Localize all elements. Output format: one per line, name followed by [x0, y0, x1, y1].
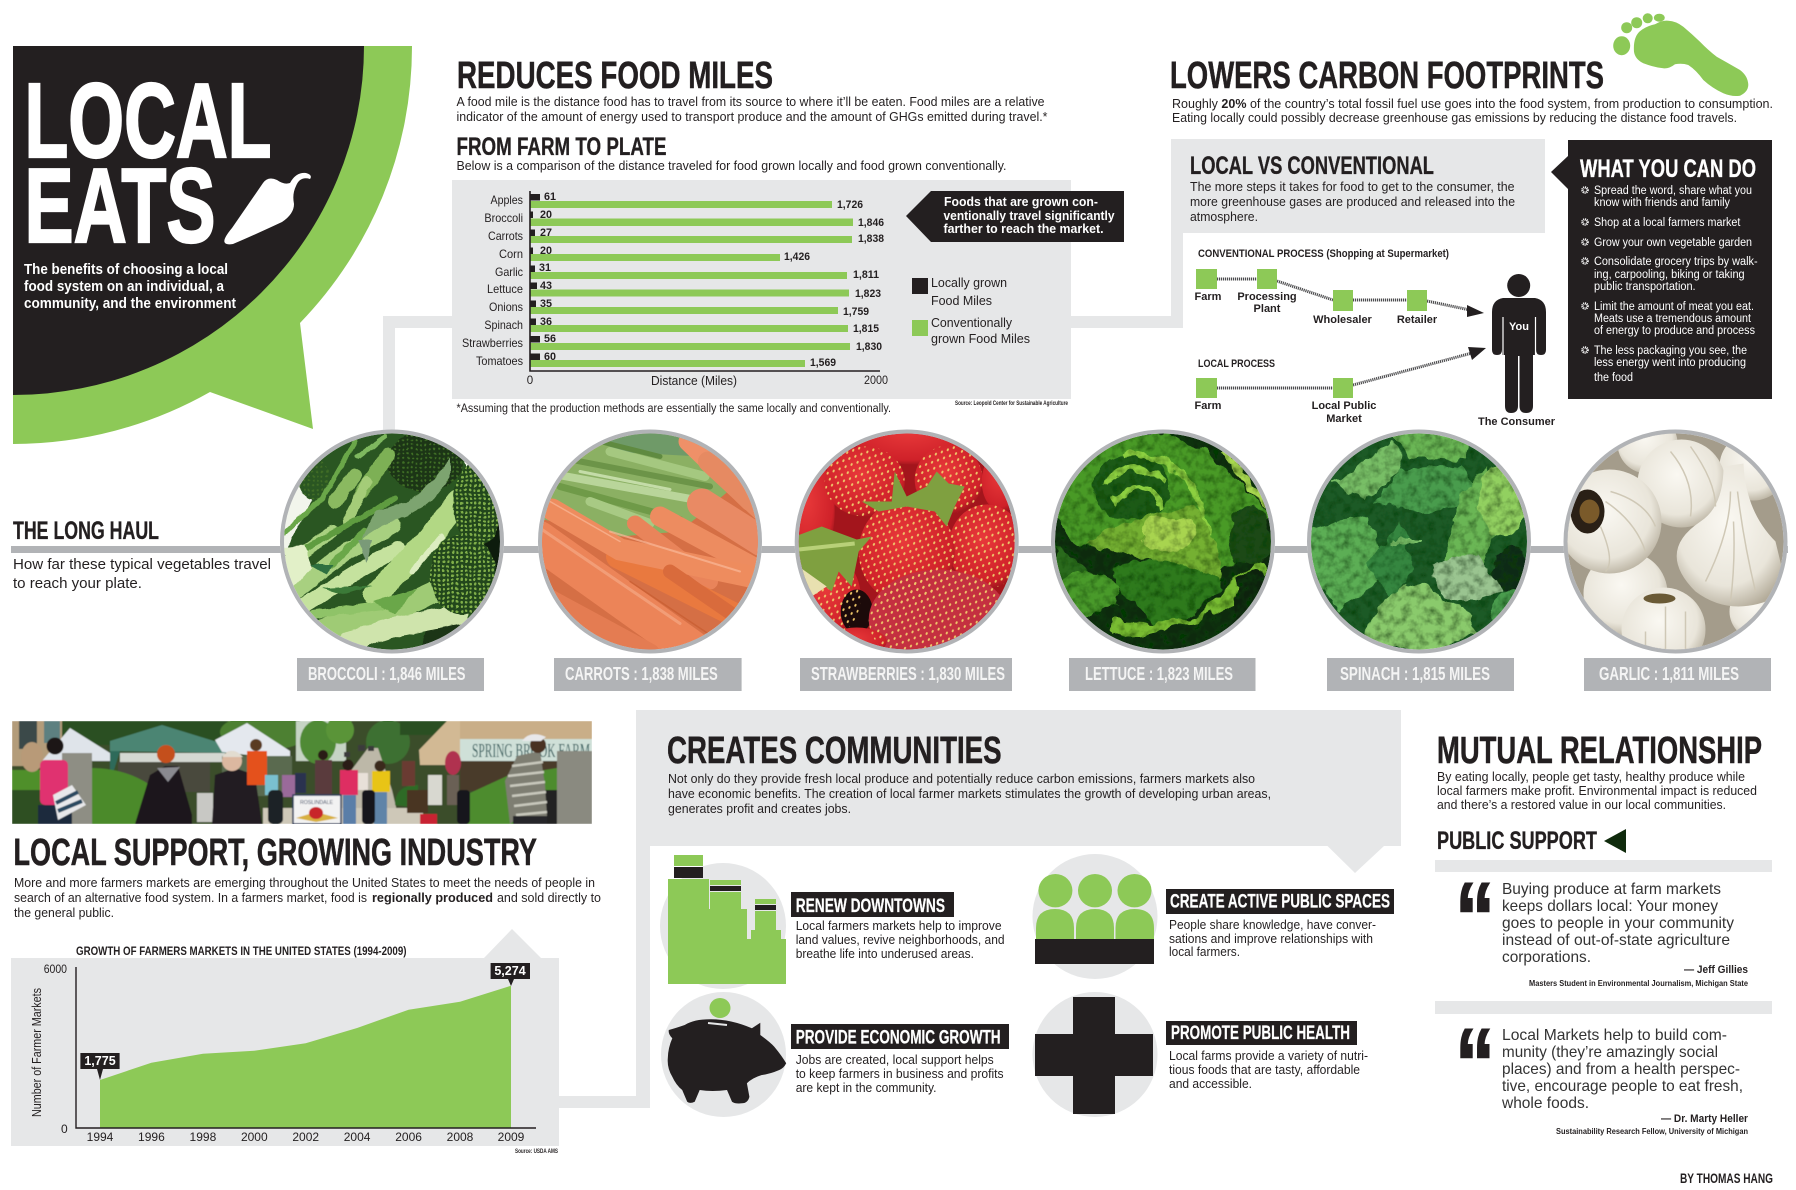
man in black [212, 768, 262, 824]
label: carrots: CARROTS : 1,838 MILES [565, 664, 718, 684]
intro text [1437, 769, 1757, 812]
intro text [14, 875, 601, 920]
diagram: conventional process: CONVENTIONAL PROCESS (Shopping at Supermarket) [1198, 248, 1449, 260]
x axis labels: 1994 [87, 1130, 114, 1144]
category labels: Spinach [484, 318, 523, 332]
axis labels: 0 [527, 375, 533, 387]
block: promote public health: tious foods that are tasty, affordable [1169, 1062, 1360, 1077]
callout: foods travel farther: ventionally travel significantly [944, 209, 1115, 223]
heading: LOCAL SUPPORT, GROWING INDUSTRY [14, 832, 537, 874]
label: garlic: GARLIC : 1,811 MILES [1599, 664, 1739, 684]
source: Source: Leopold Center for Sustainable Agriculture [955, 401, 1069, 407]
intro text: regionally produced [372, 890, 493, 905]
section: local support, growing industry [11, 714, 601, 1155]
icon: health cross [1032, 992, 1158, 1117]
label: broccoli [297, 658, 484, 691]
x axis labels: 1996 [138, 1130, 165, 1144]
striped man [545, 790, 557, 824]
store banner [460, 739, 592, 761]
green speech bubble [13, 46, 412, 444]
panel: local vs conventional: LOCAL VS CONVENTIONAL [1190, 152, 1434, 180]
chart panel [11, 929, 559, 1146]
section: lowers carbon footprints [1170, 13, 1773, 428]
step labels: Wholesaler [1313, 314, 1373, 326]
photo: broccoli [280, 430, 504, 654]
photo: farmers market: SPRING BROOK FARM [472, 740, 590, 762]
conventional values: 1,830 [856, 341, 882, 353]
block: renew downtowns [791, 892, 1005, 961]
block: promote public health: and accessible. [1169, 1076, 1252, 1091]
quote: jeff gillies: — Jeff Gillies [1684, 964, 1748, 976]
axis labels: Distance (Miles) [651, 373, 737, 388]
section: mutual relationship [1435, 730, 1772, 1136]
legend: Locally grown [931, 275, 1007, 290]
callout: foods travel farther: Foods that are grown con- [944, 195, 1098, 209]
step labels: Plant [1254, 303, 1281, 315]
local values: 20 [540, 245, 552, 257]
process connectors [1217, 353, 1472, 388]
chart description: Below is a comparison of the distance traveled for food grown locally and food grown conventionally. [456, 158, 1006, 173]
hedges [12, 769, 41, 790]
quote: marty heller: munity (they’re amazingly social [1502, 1044, 1718, 1061]
category labels: Strawberries [462, 336, 523, 350]
local bars [530, 194, 540, 360]
icon: public spaces people [1032, 854, 1158, 979]
conventional values: 1,811 [853, 269, 879, 281]
intro text: generates profit and creates jobs. [668, 801, 851, 816]
label: lettuce: LETTUCE : 1,823 MILES [1085, 664, 1233, 684]
conventional values: 1,838 [858, 233, 884, 245]
block: provide economic growth: PROVIDE ECONOMIC GROWTH [796, 1027, 1001, 1048]
legend: Food Miles [931, 293, 992, 308]
black speech bubble [13, 46, 364, 395]
intro text: Eating locally could possibly decrease greenhouse gas emissions by reducing the distance food travels. [1172, 110, 1737, 125]
legend [912, 275, 1030, 346]
icon: the consumer: You [1509, 321, 1529, 333]
panel: creates communities header [636, 710, 1401, 1108]
description [13, 556, 271, 592]
label: lettuce [1069, 658, 1256, 691]
local values: 35 [540, 298, 552, 310]
action list: Consolidate grocery trips by walk- [1594, 256, 1758, 268]
intro text: By eating locally, people get tasty, healthy produce while [1437, 769, 1745, 784]
block: promote public health: Local farms provide a variety of nutri- [1169, 1048, 1368, 1063]
section: the long haul [11, 408, 1796, 691]
action list: Grow your own vegetable garden [1594, 237, 1752, 249]
panel: local vs conventional: The more steps it takes for food to get to the consumer, the [1190, 179, 1514, 194]
quote: jeff gillies: goes to people in your community [1502, 915, 1734, 932]
label: carrots [554, 658, 742, 691]
action list: Spread the word, share what you [1594, 185, 1752, 197]
category labels: Tomatoes [476, 354, 523, 368]
heading: REDUCES FOOD MILES [457, 55, 773, 97]
category labels: Onions [489, 300, 523, 314]
legend: Conventionally [931, 315, 1012, 330]
action list: ing, carpooling, biking or taking [1594, 269, 1745, 281]
bar chart: food miles [462, 191, 888, 388]
category labels: Lettuce [487, 282, 523, 296]
source: Source: USDA AMS [515, 1149, 558, 1155]
action list: less energy went into producing [1594, 357, 1746, 369]
step labels: Farm [1195, 400, 1222, 412]
axes [76, 967, 536, 1128]
step labels [1195, 400, 1376, 425]
stone pillars [62, 753, 92, 824]
intro text: and there’s a restored value in our local communities. [1437, 797, 1726, 812]
subtitle: food system on an individual, a [24, 278, 225, 295]
tents [42, 728, 110, 761]
axis labels [527, 373, 888, 388]
legend: grown Food Miles [931, 331, 1030, 346]
crowd [265, 775, 278, 795]
axes [530, 191, 880, 371]
category labels: Garlic [495, 265, 523, 279]
bullets [1582, 187, 1588, 353]
conventional values: 1,759 [843, 306, 869, 318]
quote: marty heller: — Dr. Marty Heller [1661, 1113, 1749, 1125]
icon: city buildings [660, 855, 786, 989]
block: provide economic growth: Jobs are created, local support helps [796, 1052, 994, 1067]
local values: 43 [540, 280, 552, 292]
callout: foods travel farther [906, 191, 1124, 242]
x axis labels: 2002 [292, 1130, 319, 1144]
quote: jeff gillies: corporations. [1502, 949, 1591, 966]
photo: garlic [1564, 430, 1788, 654]
photo: strawberries [794, 430, 1019, 654]
heading: LOWERS CARBON FOOTPRINTS [1170, 55, 1604, 97]
conventional values: 1,846 [858, 217, 884, 229]
background trees and buildings [12, 721, 446, 767]
panel: local vs conventional [1171, 139, 1545, 328]
local values [539, 191, 556, 363]
block: provide economic growth: are kept in the community. [796, 1080, 936, 1095]
icon: the consumer: The Consumer [1478, 416, 1556, 428]
market stall details [402, 761, 415, 786]
grey connector lines [383, 316, 1183, 1108]
area [100, 986, 511, 1128]
action list: of energy to produce and process [1594, 325, 1755, 337]
heading: THE LONG HAUL [13, 517, 159, 545]
local values: 31 [539, 262, 551, 274]
market sign [293, 795, 341, 824]
intro text: A food mile is the distance food has to travel from its source to where it’ll be eaten. Food miles are a relative [456, 94, 1044, 109]
quote: jeff gillies: instead of out-of-state agriculture [1502, 932, 1730, 949]
photo: carrots [538, 430, 762, 654]
conventional values: 1,815 [853, 323, 879, 335]
title: EATS [24, 147, 216, 265]
block: promote public health [1166, 1021, 1368, 1091]
label: spinach: SPINACH : 1,815 MILES [1340, 664, 1490, 684]
conventional values: 1,823 [855, 288, 881, 300]
quote: jeff gillies: keeps dollars local: Your money [1502, 898, 1718, 915]
arrow head [1468, 347, 1486, 360]
axis labels: 2000 [864, 375, 888, 387]
intro text: local farmers make profit. Environmental impact is reduced [1437, 783, 1757, 798]
block: create active public spaces [1166, 889, 1394, 959]
block: provide economic growth [791, 1024, 1009, 1095]
y axis labels [30, 962, 68, 1136]
conventional values: 1,569 [810, 357, 836, 369]
subtitle: community, and the environment [24, 295, 236, 312]
title [24, 62, 272, 265]
intro text [668, 771, 1271, 816]
x axis labels: 2008 [447, 1130, 474, 1144]
category labels: Broccoli [484, 211, 523, 225]
x axis labels: 1998 [190, 1130, 217, 1144]
action list: the food [1594, 372, 1633, 384]
step labels: Market [1326, 413, 1362, 425]
timeline band [11, 546, 1788, 553]
y axis labels: 6000 [44, 962, 67, 976]
callout: 1,775 [80, 1053, 120, 1080]
action list: public transportation. [1594, 281, 1696, 293]
footnote: *Assuming that the production methods are essentially the same locally and conventionally. [456, 403, 891, 415]
block: create active public spaces: sations and improve relationships with [1169, 931, 1373, 946]
subheading: public support: PUBLIC SUPPORT [1437, 827, 1597, 855]
conventional bars [530, 201, 853, 367]
woman in pink [21, 742, 43, 772]
photo: farmers market [12, 714, 592, 824]
label: garlic [1584, 658, 1771, 691]
category labels: Carrots [488, 229, 523, 243]
category labels: Apples [490, 193, 523, 207]
diagram: local process: LOCAL PROCESS [1198, 358, 1275, 370]
process steps [1196, 269, 1427, 311]
y axis labels: Number of Farmer Markets [30, 988, 44, 1117]
category labels [462, 193, 523, 368]
quote: jeff gillies: Buying produce at farm markets [1502, 881, 1721, 898]
callout: 5,274 [491, 963, 530, 986]
intro text: have economic benefits. The creation of local farmer markets stimulates the growth of developing urban areas, [668, 786, 1271, 801]
icon: chili pepper [224, 173, 311, 244]
label: broccoli: BROCCOLI : 1,846 MILES [308, 664, 466, 684]
diagram: conventional process [1195, 248, 1484, 326]
action list: Meats use a tremendous amount [1594, 313, 1752, 325]
panel: local vs conventional: more greenhouse gases are produced and released into the [1190, 194, 1515, 209]
quote: marty heller [1455, 1008, 1749, 1136]
step labels: Farm [1195, 291, 1222, 303]
photo: lettuce [1051, 430, 1275, 654]
quote: marty heller: whole foods. [1501, 1095, 1589, 1112]
block: create active public spaces: local farmers. [1169, 944, 1240, 959]
callout: foods travel farther: farther to reach the market. [944, 222, 1104, 236]
subtitle [24, 261, 236, 312]
label: strawberries: STRAWBERRIES : 1,830 MILES [811, 664, 1005, 684]
step labels: Local Public [1312, 400, 1376, 412]
icon: green footprint [1613, 13, 1748, 96]
section: creates communities [636, 710, 1401, 1117]
block: renew downtowns: Local farmers markets help to improve [796, 918, 1002, 933]
intro text: and sold directly to [497, 890, 601, 905]
title: LOCAL [24, 62, 272, 180]
subtitle: The benefits of choosing a local [24, 261, 228, 278]
block: renew downtowns: breathe life into underused areas. [796, 946, 974, 961]
y axis labels: 0 [61, 1122, 68, 1136]
intro text: More and more farmers markets are emerging throughout the United States to meet the needs of people in [14, 875, 595, 890]
x axis labels: 2006 [395, 1130, 422, 1144]
quote: jeff gillies: Masters Student in Environmental Journalism, Michigan State [1529, 979, 1749, 988]
local values: 27 [540, 227, 552, 239]
quote: marty heller: “ [1455, 1008, 1495, 1120]
process connectors [1217, 279, 1470, 310]
quote: jeff gillies: “ [1455, 862, 1495, 974]
block: promote public health: PROMOTE PUBLIC HEALTH [1171, 1023, 1350, 1044]
local values: 20 [540, 209, 552, 221]
step labels: Processing [1237, 291, 1297, 303]
conventional values: 1,426 [784, 251, 810, 263]
local values: 60 [544, 351, 556, 363]
quote: marty heller: Sustainability Research Fellow, University of Michigan [1556, 1127, 1748, 1136]
block: renew downtowns: RENEW DOWNTOWNS [796, 896, 945, 917]
conventional values [784, 199, 884, 369]
icon: the consumer [1478, 274, 1556, 428]
intro text: search of an alternative food system. In a farmers market, food is [14, 890, 367, 905]
subheading: FROM FARM TO PLATE [456, 133, 666, 161]
x axis labels: 2004 [344, 1130, 371, 1144]
label: spinach [1327, 658, 1514, 691]
photo: spinach [1307, 430, 1531, 654]
panel: what you can do [1551, 140, 1772, 399]
local values: 36 [540, 316, 552, 328]
panel: local vs conventional: atmosphere. [1190, 209, 1258, 224]
panel: bar chart background [452, 180, 1071, 399]
label: strawberries [800, 658, 1012, 691]
intro text: indicator of the amount of energy used to transport produce and the amount of GHGs emitted during travel.* [456, 109, 1048, 124]
intro text [456, 94, 1048, 124]
local values: 61 [544, 191, 556, 203]
process steps [1196, 378, 1353, 398]
intro text: the general public. [14, 905, 114, 920]
description: to reach your plate. [13, 575, 142, 592]
x axis labels [87, 1130, 525, 1144]
arrow: public support [1604, 829, 1626, 853]
step labels: Retailer [1397, 314, 1438, 326]
category labels: Corn [499, 247, 523, 261]
local values: 56 [544, 333, 556, 345]
action list [1594, 185, 1758, 384]
block: provide economic growth: to keep farmers in business and profits [796, 1066, 1004, 1081]
heading: CREATES COMMUNITIES [667, 730, 1002, 772]
action list: Shop at a local farmers market [1594, 217, 1741, 229]
title banner: local eats [13, 46, 412, 444]
quote: marty heller: places) and from a health perspec- [1502, 1061, 1740, 1078]
street [341, 747, 397, 808]
quote: jeff gillies [1455, 862, 1749, 988]
intro text: Roughly 20% of the country’s total fossil fuel use goes into the food system, from production to consumption. [1172, 96, 1773, 111]
block: renew downtowns: land values, revive neighborhoods, and [796, 932, 1005, 947]
block: create active public spaces: CREATE ACTIVE PUBLIC SPACES [1170, 892, 1390, 912]
arrow head [1467, 305, 1484, 317]
action list: know with friends and family [1594, 197, 1730, 209]
callout: 5,274: 5,274 [494, 964, 526, 978]
action list: Limit the amount of meat you eat. [1594, 301, 1754, 313]
icon: piggy bank [661, 992, 786, 1117]
x axis labels: 2000 [241, 1130, 268, 1144]
section: reduces food miles [452, 55, 1124, 415]
intro text [1172, 96, 1773, 125]
chart title: GROWTH OF FARMERS MARKETS IN THE UNITED STATES (1994-2009) [76, 944, 406, 958]
callout: 1,775: 1,775 [84, 1054, 116, 1068]
area chart: growth of farmers markets [11, 929, 559, 1155]
quote: marty heller: Local Markets help to build com- [1502, 1027, 1727, 1044]
description: How far these typical vegetables travel [13, 556, 271, 573]
diagram: local process [1195, 347, 1486, 425]
intro text: Not only do they provide fresh local produce and potentially reduce carbon emissions, farmers markets also [668, 771, 1255, 786]
step labels [1195, 291, 1438, 326]
x axis labels: 2009 [498, 1130, 525, 1144]
action list: The less packaging you see, the [1594, 345, 1747, 357]
photo: farmers market: ROSLINDALE [300, 800, 334, 806]
block: create active public spaces: People share knowledge, have conver- [1169, 917, 1376, 932]
woman in black [135, 766, 192, 824]
conventional values: 1,726 [837, 199, 863, 211]
quote: marty heller: tive, encourage people to eat fresh, [1502, 1078, 1743, 1095]
